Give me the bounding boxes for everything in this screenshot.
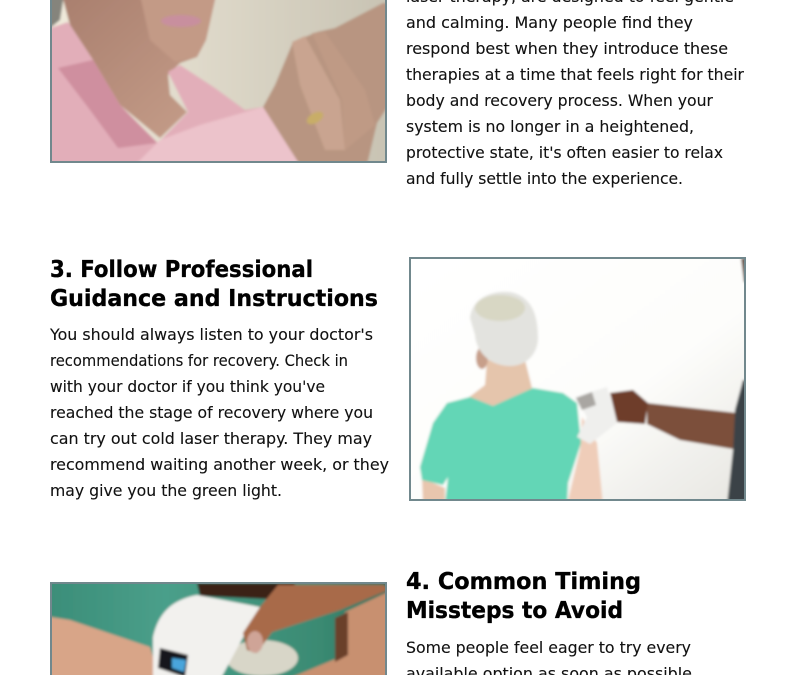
paragraph: listen to your doctor: reached the stage of recovery where you (50, 403, 373, 422)
paragraph: common timing missteps (406, 638, 697, 675)
paragraph: settle into therapy: respond best when they introduce these (406, 39, 728, 58)
heading: 4. Common Timing Missteps to Avoid (406, 567, 641, 624)
heading: 4. Common Timing Missteps to Avoid: 4. Common Timing (406, 567, 641, 595)
paragraph: listen to your doctor: may give you the green light. (50, 481, 282, 500)
photo: handheld cold laser device on an arm (45, 578, 392, 675)
paragraph: settle into therapy: system is no longer in a heightened, (406, 117, 694, 136)
photo: device applied to a woman's shoulder (405, 253, 750, 505)
paragraph: settle into therapy (406, 0, 744, 188)
heading: 3. Follow Professional Guidance and Instructions (50, 255, 378, 312)
heading: 4. Common Timing Missteps to Avoid: Missteps to Avoid (406, 596, 623, 624)
paragraph: listen to your doctor: recommendations for recovery. Check in (50, 351, 348, 370)
paragraph: listen to your doctor: with your doctor if you think you've (50, 377, 325, 396)
paragraph: settle into therapy: body and recovery process. When your (406, 91, 713, 110)
paragraph: listen to your doctor (49, 325, 389, 500)
paragraph: listen to your doctor: recommend waiting another week, or they (50, 455, 389, 474)
paragraph: settle into therapy: and calming. Many people find they (406, 13, 693, 32)
paragraph: listen to your doctor: You should always listen to your doctor's (49, 325, 373, 344)
photo: older woman holding her hand (45, 0, 392, 170)
paragraph: listen to your doctor: can try out cold laser therapy. They may (50, 429, 372, 448)
paragraph: common timing missteps: Some people feel eager to try every (406, 638, 691, 657)
paragraph: settle into therapy: therapies at a time that feels right for their (406, 65, 744, 84)
paragraph: settle into therapy: and fully settle into the experience. (406, 169, 683, 188)
heading: 3. Follow Professional Guidance and Instructions: Guidance and Instructions (50, 284, 378, 312)
paragraph: settle into therapy: protective state, it's often easier to relax (406, 143, 723, 162)
heading: 3. Follow Professional Guidance and Instructions: 3. Follow Professional (50, 255, 313, 283)
